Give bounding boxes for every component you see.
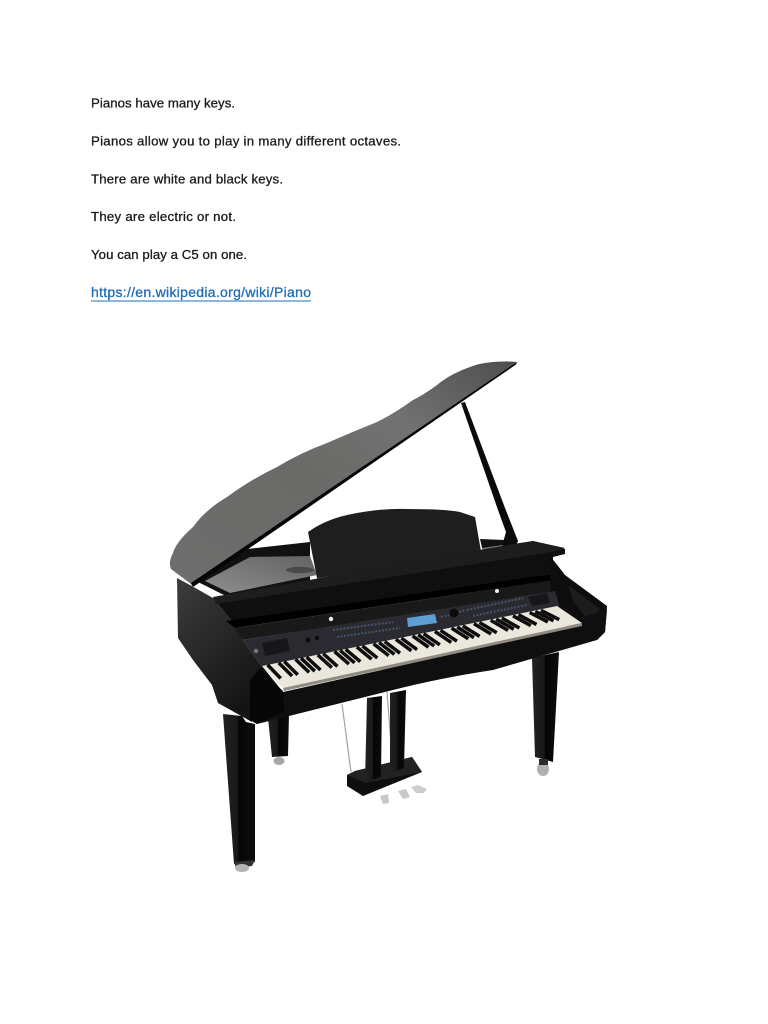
case top rim and fallboard (213, 541, 565, 640)
key front lip (283, 623, 582, 691)
pedal box and pedals (347, 757, 427, 804)
keyslip and front rail (250, 610, 607, 724)
left speaker grille (262, 638, 290, 656)
fact: octaves: Pianos allow you to play in many different octaves. (91, 134, 401, 148)
music desk (308, 509, 492, 584)
button rows (333, 598, 527, 637)
fallboard indicator dots (329, 589, 499, 621)
fact: white and black keys: There are white and black keys. (91, 172, 283, 186)
pedal lyre posts (365, 690, 406, 782)
black keys (268, 610, 559, 678)
link: Wikipedia piano article: https://en.wikipedia.org/wiki/Piano (91, 284, 311, 300)
pedal rods (342, 692, 392, 772)
text block: piano facts (91, 96, 401, 302)
raised lid (170, 362, 517, 587)
left key cheek block (250, 667, 284, 724)
control panel (243, 591, 560, 667)
knobs (306, 636, 319, 642)
front left leg (223, 714, 255, 872)
right cheek block (550, 556, 607, 640)
lid prop stick (461, 402, 518, 566)
right speaker grille (528, 593, 550, 606)
dial (450, 608, 458, 618)
fact: electric or not: They are electric or not. (91, 209, 236, 224)
piano case left side (177, 578, 262, 722)
right leg (532, 652, 559, 776)
rear left leg (268, 714, 289, 765)
white keys (262, 606, 582, 688)
open top interior (198, 539, 505, 598)
fact: many keys: Pianos have many keys. (91, 96, 235, 110)
LCD screen (407, 614, 437, 627)
keyboard (262, 606, 582, 691)
fact: C5: You can play a C5 on one. (91, 247, 247, 262)
logo mark (254, 649, 258, 653)
